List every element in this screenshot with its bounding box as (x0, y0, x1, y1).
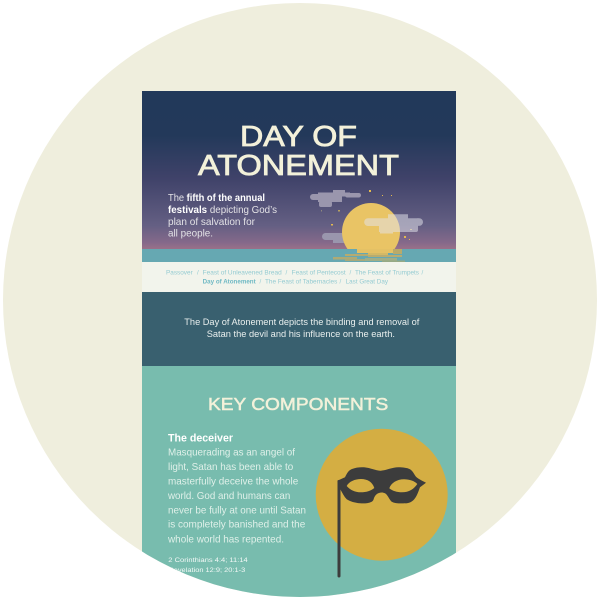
navigation links: The Feast of Trumpets (355, 270, 419, 276)
sea (142, 249, 456, 262)
cloud: over sun (364, 214, 423, 234)
intro text: festivals depicting God’s (168, 204, 277, 216)
navigation links: / (422, 270, 424, 276)
navigation links: / (286, 270, 288, 276)
intro text: The fifth of the annual (168, 192, 265, 204)
navigation links: Feast of Unleavened Bread (203, 270, 282, 276)
body text: is completely banished and the (168, 519, 305, 531)
panel: description (142, 292, 456, 366)
stars (321, 190, 412, 240)
cloud: behind sun (322, 233, 344, 243)
body text: whole world has repented. (167, 533, 284, 545)
intro text (168, 192, 277, 240)
description text: Satan the devil and his influence on the earth. (207, 329, 395, 340)
subheading: The deceiver (168, 432, 234, 444)
navigation links: / (197, 270, 199, 276)
navigation links (166, 270, 424, 286)
body text: masterfully deceive the whole (168, 476, 298, 488)
navigation links: Feast of Pentecost (292, 270, 346, 276)
navigation links: Passover (166, 270, 193, 276)
cloud: upper left (310, 190, 361, 207)
scripture references: Revelation 12:9; 20:1-3 (168, 567, 246, 574)
navigation links: The Feast of Tabernacles (265, 279, 337, 286)
body text: light, Satan has been able to (168, 461, 293, 473)
scripture references (168, 557, 248, 574)
body text: never be fully at one until Satan (168, 504, 306, 516)
navigation links: Day of Atonement (203, 279, 256, 286)
title (197, 125, 399, 176)
navigation links: Last Great Day (346, 279, 389, 286)
navigation strip (142, 262, 456, 292)
description text: The Day of Atonement depicts the binding and removal of (184, 317, 420, 328)
intro text: all people. (168, 228, 213, 240)
body text: world. God and humans can (167, 490, 290, 502)
heading: KEY COMPONENTS (208, 394, 388, 414)
description text (184, 318, 420, 337)
panel: hero sky (142, 91, 456, 249)
navigation links: / (350, 270, 352, 276)
panel: key components (142, 366, 456, 600)
icon: masquerade mask (337, 467, 426, 578)
icon: setting sun (342, 203, 400, 249)
navigation links: / (260, 279, 262, 286)
intro text: plan of salvation for (168, 216, 255, 228)
navigation links: / (340, 279, 342, 286)
scripture references: 2 Corinthians 4:4; 11:14 (168, 557, 248, 564)
title: DAY OF (240, 121, 357, 153)
icon: gold circle (316, 429, 448, 561)
body text (167, 447, 306, 545)
body text: Masquerading as an angel of (168, 447, 295, 459)
sun reflection (333, 249, 405, 262)
clipped poster panel (142, 91, 456, 600)
title: ATONEMENT (198, 150, 399, 182)
